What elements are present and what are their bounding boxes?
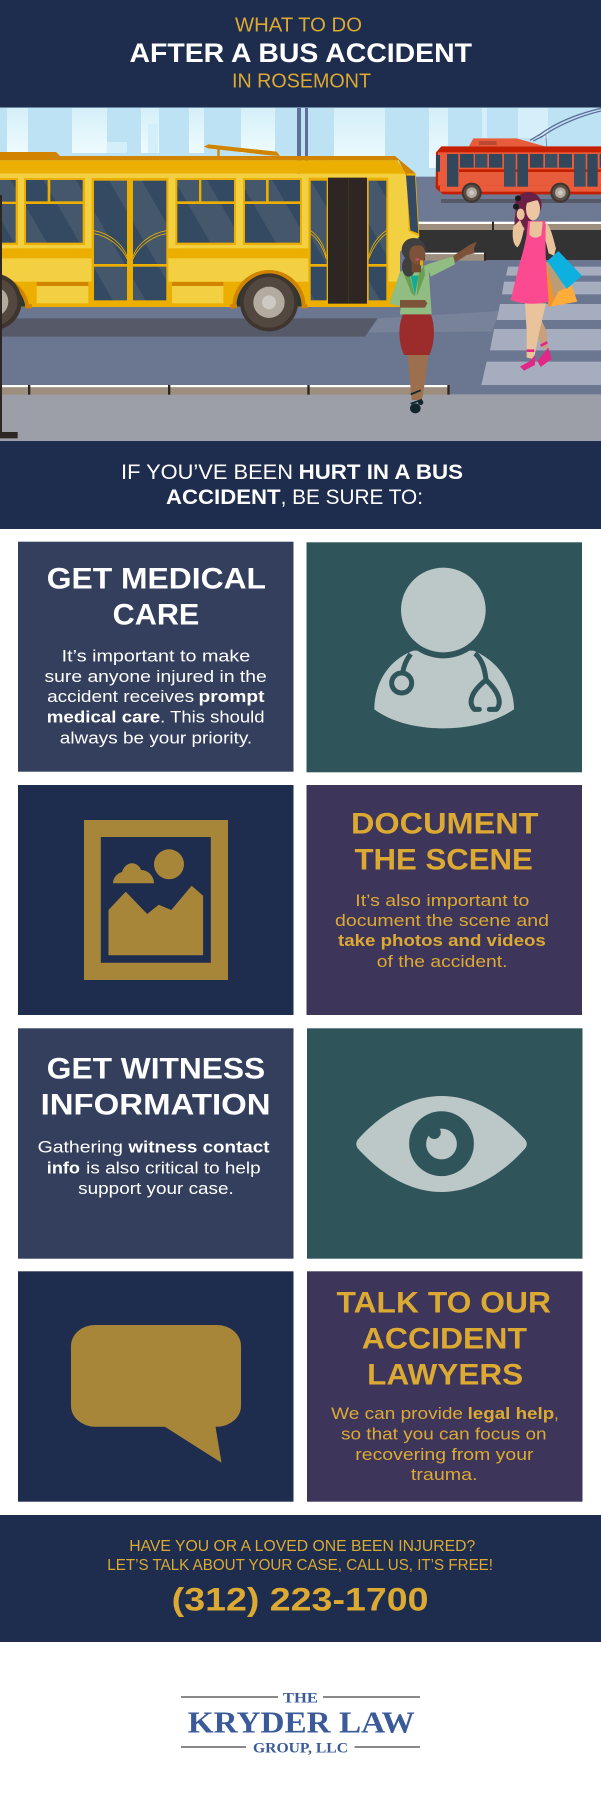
heading: get medical care: GET MEDICAL xyxy=(47,563,266,596)
text: document the scene body: take photos and videos xyxy=(338,932,546,950)
panel: eye icon xyxy=(307,1028,582,1259)
heading: get medical care: CARE xyxy=(113,599,199,632)
heading: talk to our accident lawyers xyxy=(336,1287,551,1392)
text: lawyers body xyxy=(331,1405,559,1484)
text: document the scene body: document the scene and xyxy=(335,912,549,930)
text: witness body xyxy=(38,1139,270,1198)
sky and city skyline xyxy=(0,107,601,178)
logo: The Kryder Law Group: GROUP, LLC xyxy=(253,1741,348,1757)
intro banner xyxy=(0,441,601,529)
text: document the scene body: of the accident. xyxy=(377,953,508,971)
logo: The Kryder Law Group: KRYDER LAW xyxy=(188,1705,415,1740)
heading: document the scene xyxy=(351,807,538,876)
text: witness body: is also critical to help xyxy=(86,1159,261,1177)
text: lawyers body: trauma. xyxy=(411,1466,478,1484)
icon: framed picture xyxy=(84,820,228,980)
text: medical care body: always be your priority. xyxy=(60,729,252,747)
text: lawyers body: legal help xyxy=(468,1405,554,1423)
icon: speech bubble xyxy=(71,1325,241,1463)
panel: get medical care xyxy=(18,542,294,772)
icon: eye xyxy=(356,1096,527,1192)
woman with shopping bags xyxy=(511,192,582,371)
text: medical care body: accident receives xyxy=(47,688,194,706)
text: document the scene body: It’s also important to xyxy=(355,892,529,910)
intro banner: IF YOU’VE BEEN xyxy=(121,461,293,484)
intro banner: , BE SURE TO: xyxy=(281,486,423,509)
text: lawyers body: so that you can focus on xyxy=(341,1425,547,1443)
heading: document the scene: DOCUMENT xyxy=(351,807,538,840)
text: witness body: Gathering xyxy=(38,1139,123,1157)
text: medical care body: medical care xyxy=(47,709,160,727)
text: medical care body xyxy=(44,647,267,747)
intro banner: ACCIDENT xyxy=(166,486,281,509)
text: lawyers body: We can provide xyxy=(331,1405,463,1423)
logo: The Kryder Law Group xyxy=(181,1691,420,1757)
panel: photo icon xyxy=(18,785,294,1015)
bus wheels and lamp post xyxy=(0,195,307,438)
road, curbs and crosswalk xyxy=(0,177,601,441)
panel: get witness information xyxy=(18,1028,294,1259)
header band xyxy=(0,0,601,108)
heading: talk to our accident lawyers: ACCIDENT xyxy=(362,1323,527,1356)
text: lawyers body: , xyxy=(554,1405,559,1423)
text: medical care body: prompt xyxy=(198,688,265,706)
heading: get witness information: GET WITNESS xyxy=(47,1053,265,1086)
heading: get witness information: INFORMATION xyxy=(41,1089,271,1122)
yellow bus xyxy=(0,144,300,307)
panel: document the scene xyxy=(306,785,582,1015)
red trolley bus xyxy=(436,108,601,203)
footer call to action band xyxy=(0,1515,601,1642)
panel: doctor icon xyxy=(306,542,582,772)
text: witness body: support your case. xyxy=(78,1180,234,1198)
panel: talk to our accident lawyers xyxy=(307,1271,582,1502)
header line: what to do: WHAT TO DO xyxy=(235,15,362,37)
heading: get witness information xyxy=(41,1053,271,1122)
text: call to action: LET’S TALK ABOUT YOUR CASE, CALL US, IT’S FREE! xyxy=(107,1557,493,1574)
heading: talk to our accident lawyers: LAWYERS xyxy=(367,1359,523,1392)
heading: talk to our accident lawyers: TALK TO OUR xyxy=(336,1287,551,1320)
illustration: bus accident street scene xyxy=(0,107,601,441)
text: lawyers body: recovering from your xyxy=(355,1446,534,1464)
intro banner: HURT IN A BUS xyxy=(299,461,463,484)
text: call to action xyxy=(107,1538,493,1574)
main title: AFTER A BUS ACCIDENT xyxy=(130,38,473,68)
header line: in Rosemont: IN ROSEMONT xyxy=(232,70,371,92)
text: witness body: witness contact xyxy=(127,1139,270,1157)
heading: get medical care xyxy=(47,563,266,632)
heading: document the scene: THE SCENE xyxy=(354,843,533,876)
woman pointing xyxy=(389,238,477,413)
logo: The Kryder Law Group: THE xyxy=(283,1691,318,1707)
text: witness body: info xyxy=(47,1159,80,1177)
panel: speech bubble icon xyxy=(18,1271,294,1502)
text: medical care body: . This should xyxy=(160,709,264,727)
text: call to action: HAVE YOU OR A LOVED ONE BEEN INJURED? xyxy=(129,1538,475,1555)
phone number: (312) 223-1700 xyxy=(172,1582,428,1618)
yellow bus front and door xyxy=(300,156,419,307)
icon: doctor with stethoscope xyxy=(374,562,514,728)
text: document the scene body xyxy=(335,892,549,971)
text: medical care body: It’s important to make xyxy=(62,647,250,665)
text: medical care body: sure anyone injured in the xyxy=(44,668,267,686)
